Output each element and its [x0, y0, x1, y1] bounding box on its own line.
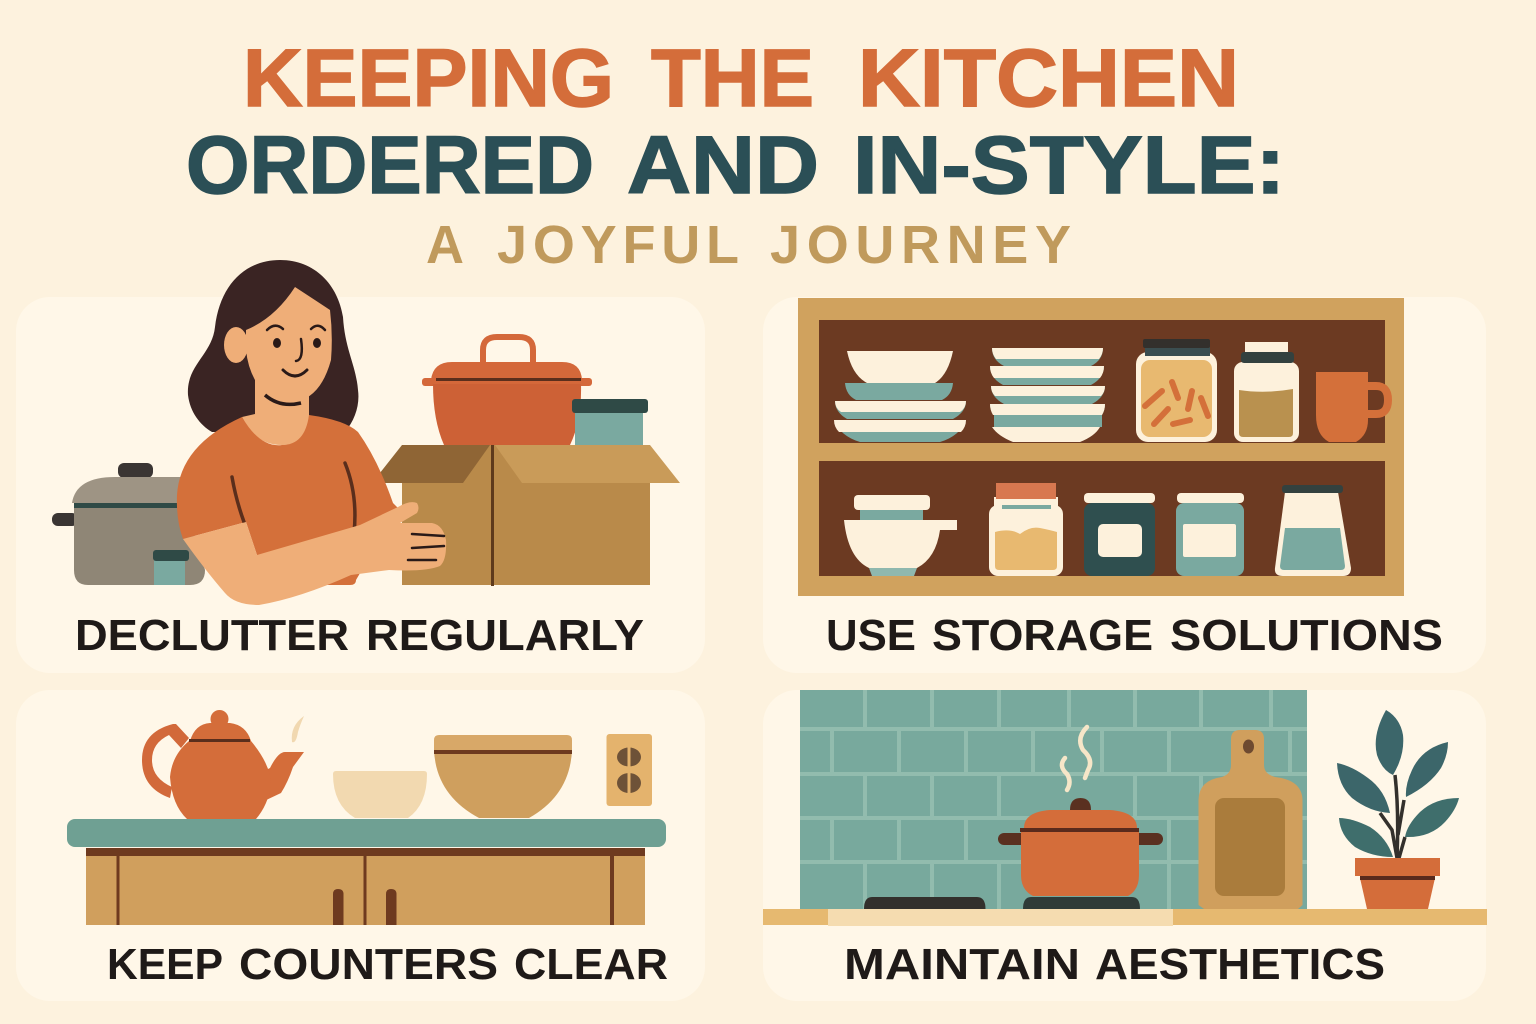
icon: woman [177, 260, 446, 605]
shelf unit [798, 298, 1404, 596]
icon: pot on stove [998, 798, 1163, 896]
title line 2: IN-STYLE: [853, 120, 1285, 211]
label: SOLUTIONS [1170, 611, 1443, 660]
spice jar [1234, 342, 1299, 442]
facial features [267, 326, 325, 376]
tile backsplash [800, 690, 1307, 909]
subtitle: JOURNEY [770, 215, 1071, 275]
counter top [67, 819, 666, 847]
label [75, 611, 644, 660]
leaves [1337, 710, 1459, 857]
dark jar [1084, 493, 1155, 576]
label: CLEAR [514, 940, 668, 989]
icon: cardboard box with pot [372, 337, 680, 586]
subtitle [426, 215, 1071, 275]
label [826, 611, 1443, 660]
icon: teapot [142, 710, 304, 819]
flour jar [989, 483, 1063, 576]
neck [242, 380, 309, 445]
glass jar [1275, 485, 1351, 576]
handle [142, 724, 189, 798]
orange mug [1316, 372, 1388, 442]
label: COUNTERS [239, 940, 498, 989]
label: REGULARLY [366, 611, 644, 660]
icon: wall outlet [606, 734, 652, 806]
title [186, 33, 1285, 275]
icon: cutting board [1198, 730, 1302, 909]
stacked bowls [834, 351, 966, 442]
chin shadow [265, 395, 301, 404]
icon: potted plant [1337, 710, 1459, 909]
title line 2: AND [627, 120, 819, 211]
small jar [153, 550, 189, 585]
stove burners [864, 897, 1140, 909]
arm and hand [183, 502, 446, 605]
icon: wooden bowl [434, 735, 572, 818]
panel: declutter regularly [16, 260, 705, 673]
label: DECLUTTER [75, 611, 349, 660]
label: MAINTAIN [844, 940, 1080, 989]
panel: keep counters clear [16, 690, 705, 1001]
label: STORAGE [932, 611, 1153, 660]
icon: grey pot [52, 463, 205, 585]
label [107, 940, 668, 989]
subtitle: A [426, 215, 464, 275]
plant pot [1355, 858, 1440, 909]
bowl set [844, 495, 957, 576]
stems [1380, 775, 1405, 858]
face [246, 287, 332, 402]
panel: use storage solutions [763, 297, 1486, 673]
label [844, 940, 1385, 989]
hair [188, 260, 358, 432]
title line 2 [186, 120, 1285, 211]
title line 1: THE [651, 33, 814, 124]
label: KEEP [107, 940, 223, 989]
teapot steam [292, 716, 304, 742]
spout [262, 752, 304, 802]
icon: steam [1062, 727, 1090, 790]
ear [224, 327, 248, 363]
pasta jar [1136, 339, 1217, 442]
orange pot [422, 337, 592, 445]
title line 1: KEEPING [243, 33, 614, 124]
title line 1: KITCHEN [858, 33, 1239, 124]
icon: cream bowl [333, 771, 427, 818]
countertop [763, 909, 1487, 926]
label: USE [826, 611, 916, 660]
teal container [572, 399, 648, 445]
cabinets [86, 848, 645, 925]
panel: maintain aesthetics [763, 690, 1487, 1001]
shirt [177, 415, 398, 585]
title line 1 [243, 33, 1239, 124]
subtitle: JOYFUL [497, 215, 739, 275]
stacked plates [990, 348, 1105, 442]
teal jar [1176, 493, 1244, 576]
title line 2: ORDERED [186, 120, 594, 211]
label: AESTHETICS [1095, 940, 1385, 989]
